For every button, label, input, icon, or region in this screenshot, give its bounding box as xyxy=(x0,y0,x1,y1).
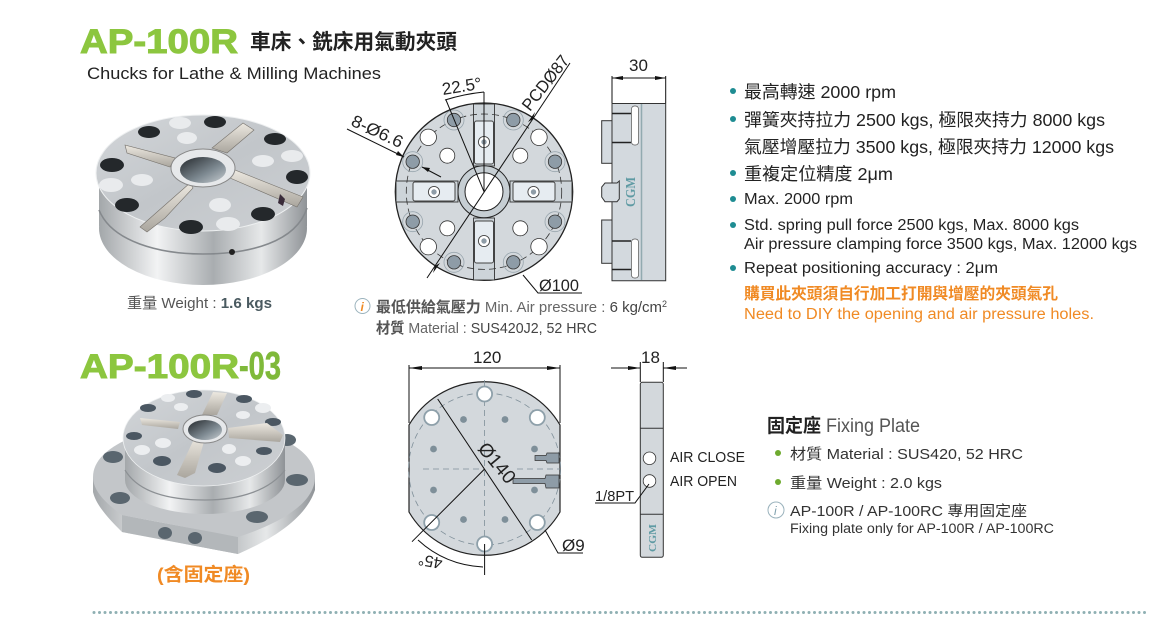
dimension: PCD 87: PCDØ87 xyxy=(518,52,573,114)
specs: bullet list: 彈簧夾持拉力 2500 kgs, 極限夾持力 8000 kgs xyxy=(744,110,1105,130)
warning: DIY note: 購買此夾頭須自行加工打開與增壓的夾頭氣孔 xyxy=(744,284,1058,303)
note: air pressure and material: i xyxy=(360,300,364,314)
dimension: 30: 30 xyxy=(629,56,648,75)
list: fixing plate specs: 重量 Weight : 2.0 kgs xyxy=(790,475,942,492)
diagram: chuck side view xyxy=(602,104,666,281)
label: weight: 重量 Weight : 1.6 kgs xyxy=(127,295,272,312)
specs: bullet list: 最高轉速 2000 rpm xyxy=(744,82,896,102)
note: air pressure and material xyxy=(355,298,667,337)
list: fixing plate specs: 材質 Material : SUS420, 52 HRC xyxy=(790,445,1023,463)
label: 1/8PT xyxy=(595,484,649,505)
dimension: Ø140 xyxy=(438,399,532,540)
footer dotted line xyxy=(94,611,1150,614)
note: fixing plate only xyxy=(768,502,1054,536)
diagram: fixing plate side view: CGM xyxy=(647,523,659,552)
label: AIR OPEN: AIR OPEN xyxy=(670,474,737,490)
note: fixing plate only: i xyxy=(774,504,777,518)
warning: DIY note xyxy=(744,284,1094,323)
diagram: fixing plate front view xyxy=(409,380,561,558)
specs: bullet list: 氣壓增壓拉力 3500 kgs, 極限夾持力 12000 kgs xyxy=(744,137,1114,157)
specs: bullet list: Repeat positioning accuracy : 2μm xyxy=(744,260,998,277)
diagram: chuck side view: CGM xyxy=(624,177,639,207)
dimension: Ø9: Ø9 xyxy=(562,536,585,555)
heading: fixing plate: 固定座 Fixing Plate xyxy=(767,414,920,437)
dimension: 120: 120 xyxy=(473,348,501,367)
dimension: 18 xyxy=(611,348,687,382)
specs: bullet list: Std. spring pull force 2500 kgs, Max. 8000 kgs xyxy=(744,217,1079,234)
dimension: Ø140: Ø140 xyxy=(473,439,519,488)
photo: AP-100R chuck xyxy=(96,115,310,285)
specs: bullet list: 重複定位精度 2μm xyxy=(744,164,893,184)
specs: bullet list: Air pressure clamping force 3500 kgs, Max. 12000 kgs xyxy=(744,236,1137,253)
title: AP-100R-03: AP-100R xyxy=(80,348,239,386)
title: AP-100R-03: -03 xyxy=(239,345,281,388)
diagram: fixing plate side view xyxy=(640,382,663,557)
dimension: 45 degrees xyxy=(412,469,485,575)
dimension: Ø9 xyxy=(545,530,585,555)
label: 1/8PT: 1/8PT xyxy=(595,489,634,505)
title: AP-100R-03 xyxy=(80,345,281,388)
heading: chinese subtitle: 車床、銑床用氣動夾頭 xyxy=(250,30,457,54)
dimension: 22.5 degrees xyxy=(441,74,484,192)
dimension: 22.5 degrees: 22.5° xyxy=(441,74,483,99)
label: AIR CLOSE: AIR CLOSE xyxy=(670,450,745,466)
heading: english subtitle: Chucks for Lathe & Milling Machines xyxy=(87,64,381,83)
specs: bullet list xyxy=(730,82,1137,277)
note: air pressure and material: 2 xyxy=(662,299,667,309)
dimension: PCD 87 xyxy=(427,52,573,278)
note: fixing plate only: Fixing plate only for AP-100R / AP-100RC xyxy=(790,521,1054,536)
dimension: 18: 18 xyxy=(641,348,660,367)
warning: DIY note: Need to DIY the opening and air pressure holes. xyxy=(744,306,1094,323)
note: air pressure and material: 最低供給氣壓力 Min. Air pressure : 6 kg/cm xyxy=(376,299,662,316)
list: fixing plate specs xyxy=(775,445,1023,492)
dimension: 120 xyxy=(409,348,560,423)
dimension: 8-Ø6.6 xyxy=(347,111,441,177)
dimension: 8-Ø6.6: 8-Ø6.6 xyxy=(348,111,406,152)
dimension: 45 degrees: 45° xyxy=(417,550,444,571)
note: fixing plate only: AP-100R / AP-100RC 專用固定座 xyxy=(790,503,1027,520)
dimension: 30 xyxy=(612,56,666,103)
photo: AP-100R-03 chuck with plate xyxy=(93,390,315,554)
specs: bullet list: Max. 2000 rpm xyxy=(744,191,853,208)
diagram: chuck front view xyxy=(395,103,573,280)
dimension: Ø100 xyxy=(523,275,582,295)
dimension: Ø100: Ø100 xyxy=(539,276,579,295)
label: includes fixing plate: (含固定座) xyxy=(157,564,250,585)
note: air pressure and material: 材質 Material : SUS420J2, 52 HRC xyxy=(376,319,597,337)
title: AP-100R: AP-100R xyxy=(80,23,238,61)
